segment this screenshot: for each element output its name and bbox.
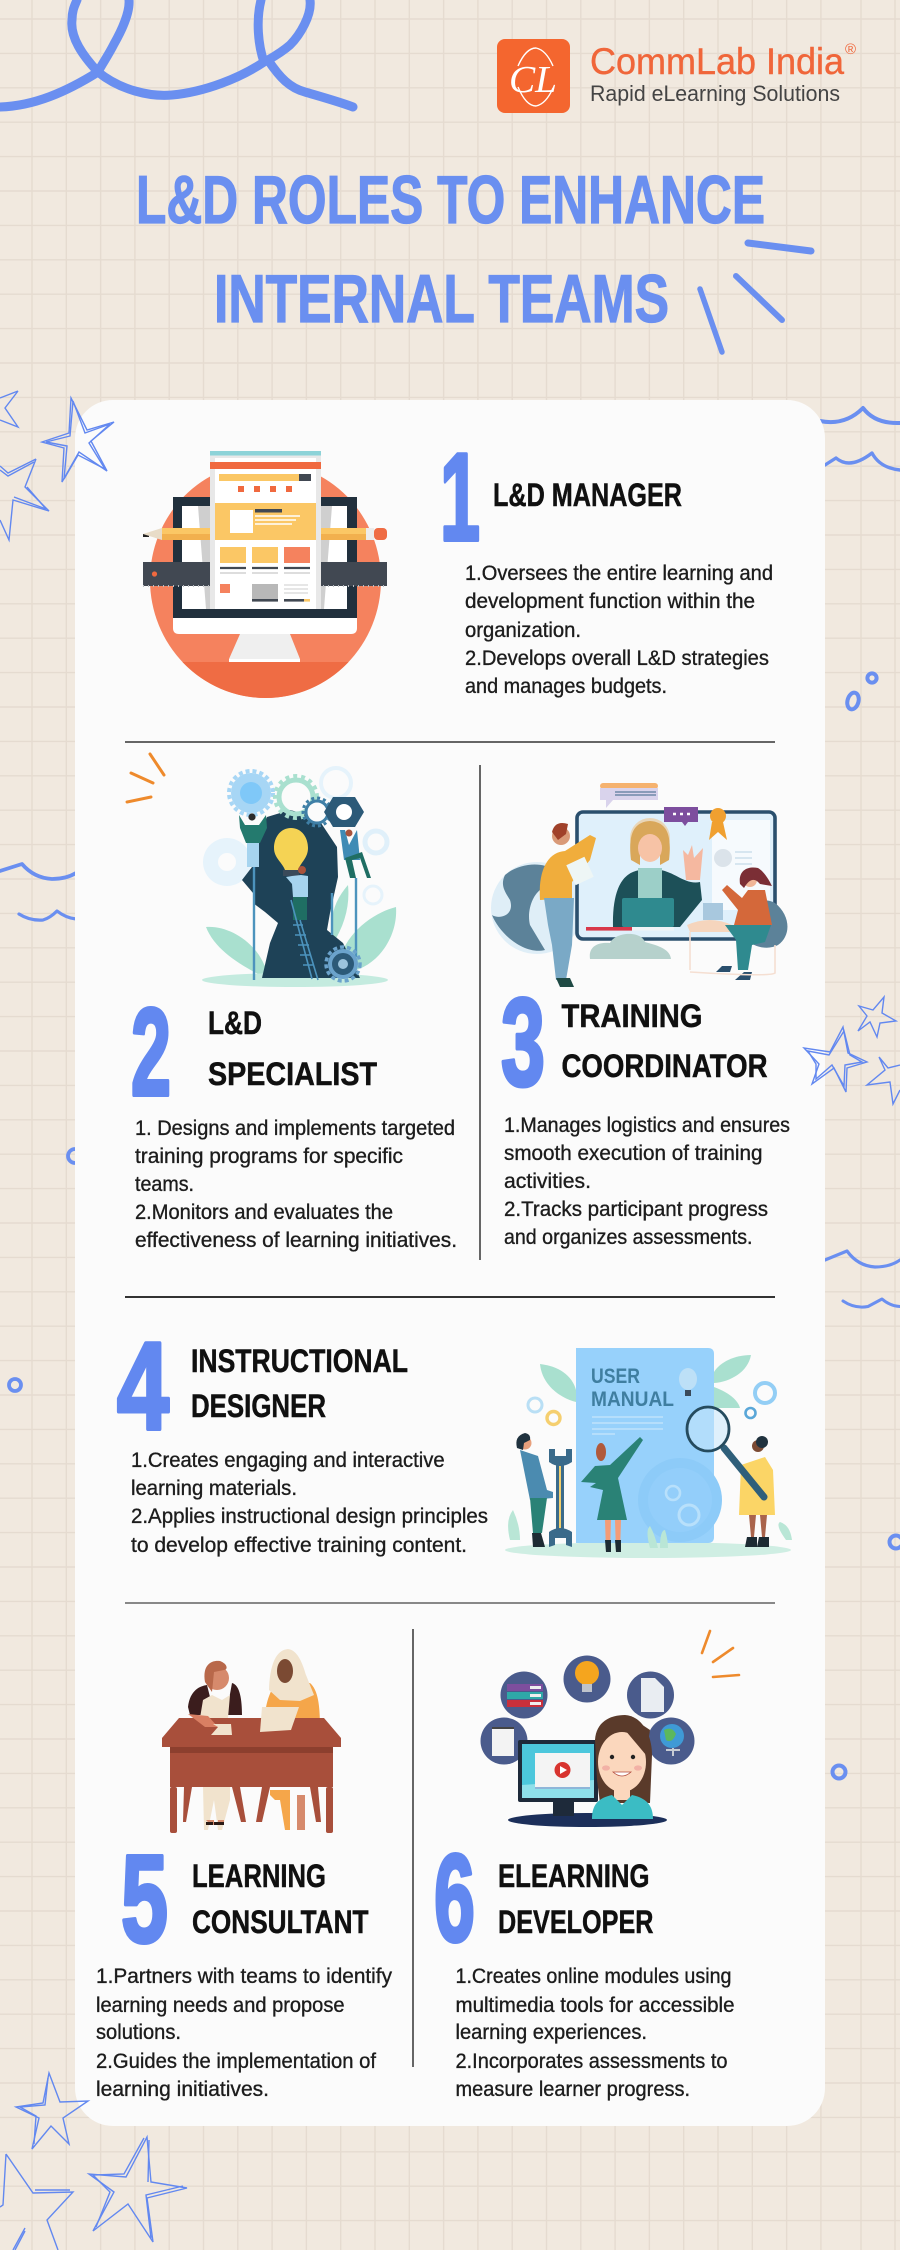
section 4: Instructional Designer xyxy=(117,1318,792,1558)
illustration: user manual with team xyxy=(505,1348,792,1558)
heading: L&D Specialist: L&D xyxy=(208,1005,262,1041)
heading: eLearning Developer: ELEARNING xyxy=(498,1858,650,1894)
heading: Training Coordinator xyxy=(562,998,768,1084)
text: consultant duties: learning initiatives. xyxy=(96,2078,269,2101)
heading: L&D Specialist xyxy=(208,1005,377,1092)
heading: Instructional Designer xyxy=(191,1343,408,1424)
heading: eLearning Developer: DEVELOPER xyxy=(498,1904,654,1940)
illustration: monitor with web page xyxy=(143,451,387,698)
logo mark: CL xyxy=(509,59,557,101)
text: developer duties xyxy=(456,1965,734,2101)
text: developer duties: multimedia tools for accessible xyxy=(456,1994,734,2017)
decoration: stars right xyxy=(804,997,900,1104)
heading: Instructional Designer: INSTRUCTIONAL xyxy=(191,1343,408,1379)
icon: orange accent strokes xyxy=(127,754,164,802)
text: coordinator duties: and organizes assessments. xyxy=(504,1226,752,1249)
heading: L&D Manager: L&D MANAGER xyxy=(493,477,682,513)
text: specialist duties: 2.Monitors and evaluates the xyxy=(135,1201,393,1224)
illustration: user manual with team: USER xyxy=(591,1365,640,1388)
text: coordinator duties: activities. xyxy=(504,1170,591,1193)
section 3: Training Coordinator xyxy=(491,783,790,1249)
heading: Learning Consultant xyxy=(192,1858,369,1940)
text: developer duties: learning experiences. xyxy=(456,2021,647,2044)
text: coordinator duties: 2.Tracks participant progress xyxy=(504,1198,768,1221)
decoration: stars top left xyxy=(0,391,114,540)
heading: Learning Consultant: LEARNING xyxy=(192,1858,326,1894)
text: manager duties: and manages budgets. xyxy=(465,675,667,698)
number 2: 2 xyxy=(131,984,171,1122)
illustration: developer with monitor and icons xyxy=(480,1656,694,1827)
heading: Learning Consultant: CONSULTANT xyxy=(192,1904,369,1940)
text: consultant duties: solutions. xyxy=(96,2021,181,2044)
text: specialist duties xyxy=(135,1117,457,1252)
illustration: head with lightbulb and gears xyxy=(202,768,396,987)
number 5: 5 xyxy=(121,1831,168,1969)
text: manager duties: 2.Develops overall L&D strategies xyxy=(465,647,769,670)
text: specialist duties: 1. Designs and implements targeted xyxy=(135,1117,455,1140)
heading: eLearning Developer xyxy=(498,1858,654,1940)
title: INTERNAL TEAMS xyxy=(214,261,669,337)
section 2: L&D Specialist xyxy=(127,754,457,1252)
number 3: 3 xyxy=(501,974,545,1112)
white content card xyxy=(75,400,825,2126)
heading: Training Coordinator: COORDINATOR xyxy=(562,1048,768,1084)
text: specialist duties: teams. xyxy=(135,1173,194,1196)
decoration: left side squiggles xyxy=(0,864,82,1391)
text: manager duties xyxy=(465,562,773,698)
section 1: L&D Manager xyxy=(143,429,773,698)
text: designer duties xyxy=(131,1449,488,1557)
text: developer duties: 1.Creates online modules using xyxy=(456,1965,732,1988)
text: designer duties: to develop effective training content. xyxy=(131,1534,467,1557)
illustration: two colleagues at a desk xyxy=(162,1649,341,1833)
text: developer duties: measure learner progress. xyxy=(456,2078,690,2101)
text: coordinator duties: smooth execution of training xyxy=(504,1142,762,1165)
title xyxy=(136,162,765,337)
text: designer duties: 1.Creates engaging and interactive xyxy=(131,1449,445,1472)
text: consultant duties xyxy=(96,1965,392,2101)
text: consultant duties: 1.Partners with teams to identify xyxy=(96,1965,392,1988)
logo: CommLab India xyxy=(497,39,856,113)
decoration: stars bottom left xyxy=(0,2073,187,2250)
icon: orange accent strokes xyxy=(702,1631,739,1677)
illustration: online training session xyxy=(491,783,787,987)
registered mark: ® xyxy=(845,41,856,58)
logo wordmark: CommLab India xyxy=(590,41,844,82)
number 1: 1 xyxy=(440,429,480,567)
text: manager duties: 1.Oversees the entire learning and xyxy=(465,562,773,585)
text: designer duties: learning materials. xyxy=(131,1477,297,1500)
section 6: eLearning Developer xyxy=(434,1631,739,2101)
section 5: Learning Consultant xyxy=(96,1649,392,2101)
illustration: user manual with team: MANUAL xyxy=(591,1388,674,1411)
text: designer duties: 2.Applies instructional design principles xyxy=(131,1505,488,1528)
text: specialist duties: training programs for specific xyxy=(135,1145,403,1168)
decoration: title accent strokes xyxy=(700,243,811,352)
number 4: 4 xyxy=(117,1318,169,1456)
logo mark xyxy=(497,39,570,113)
text: consultant duties: learning needs and propose xyxy=(96,1994,344,2017)
text: coordinator duties xyxy=(504,1114,790,1249)
heading: L&D Specialist: SPECIALIST xyxy=(208,1056,377,1092)
number 6: 6 xyxy=(434,1830,475,1968)
text: specialist duties: effectiveness of learning initiatives. xyxy=(135,1229,457,1252)
text: manager duties: organization. xyxy=(465,619,581,642)
heading: Instructional Designer: DESIGNER xyxy=(191,1388,326,1424)
text: developer duties: 2.Incorporates assessments to xyxy=(456,2050,728,2073)
text: consultant duties: 2.Guides the implementation of xyxy=(96,2050,376,2073)
decoration: top-left loops xyxy=(0,0,353,107)
logo tagline: Rapid eLearning Solutions xyxy=(590,81,840,106)
decoration: right side squiggles and dots xyxy=(820,408,900,1778)
text: coordinator duties: 1.Manages logistics and ensures xyxy=(504,1114,790,1137)
text: manager duties: development function within the xyxy=(465,590,755,613)
heading: Training Coordinator: TRAINING xyxy=(562,998,702,1034)
